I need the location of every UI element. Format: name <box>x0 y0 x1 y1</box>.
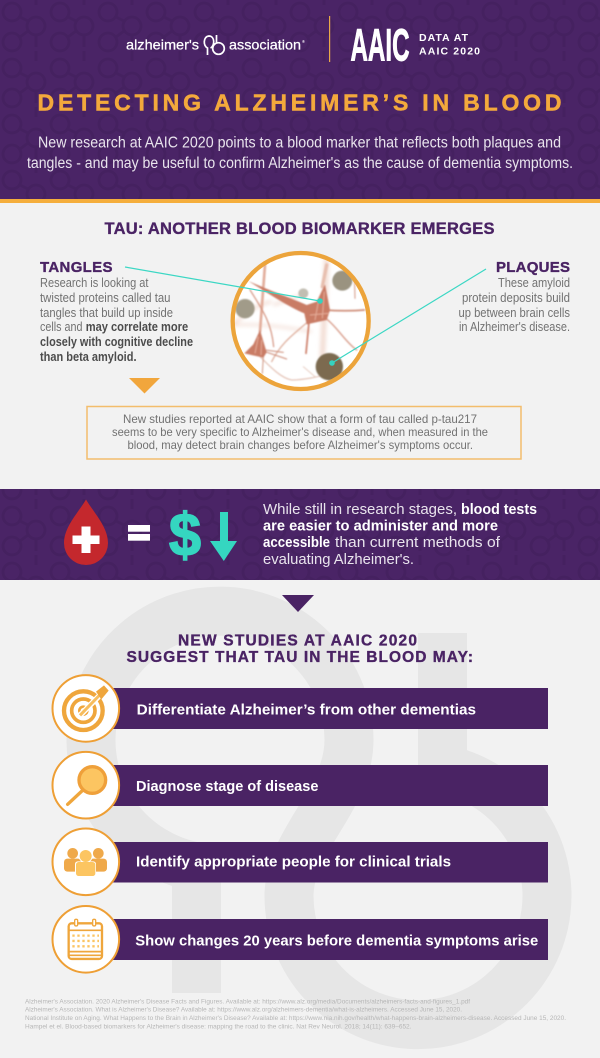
watermark: alzheimer's association symbol <box>91 611 547 1025</box>
plaques <box>235 299 255 318</box>
heading: new studies <box>126 632 473 666</box>
callout box: p-tau217: seems to be very specific to Alzheimer's disease and, when measured in the <box>112 425 488 439</box>
text block: tangles <box>40 259 193 364</box>
callout box: p-tau217: blood, may detect brain changes before Alzheimer's symptoms occur. <box>128 438 473 452</box>
blood tests text: While still in research stages, <box>263 502 457 518</box>
list item: show changes: Show changes 20 years before dementia symptoms arise <box>135 933 538 950</box>
text block: plaques <box>458 259 570 334</box>
data at AAIC 2020 label: DATA AT <box>419 32 469 44</box>
heading: new studies: SUGGEST THAT TAU IN THE BLOOD MAY: <box>126 649 473 666</box>
logo: alzheimer's association <box>126 35 305 55</box>
list item: diagnose: Diagnose stage of disease <box>136 778 318 795</box>
icon: calendar <box>69 919 102 959</box>
list item: diagnose <box>53 752 548 818</box>
text block: tangles: closely with cognitive decline <box>40 335 193 349</box>
references <box>25 998 566 1030</box>
plaques heading: PLAQUES <box>496 259 570 276</box>
data at AAIC 2020 label: AAIC 2020 <box>419 46 480 58</box>
text block: tangles: may correlate more <box>86 320 188 334</box>
panel: blood tests band <box>0 489 600 580</box>
icon: target with arrow <box>64 685 109 730</box>
text block: tangles: cells and <box>40 320 83 334</box>
icon: group of people <box>64 848 107 877</box>
icon: dollar sign: $ <box>169 502 201 568</box>
logo: AAIC: AAIC <box>350 20 410 70</box>
blood tests text: are easier to administer and more <box>263 518 498 534</box>
callout line: tangles <box>125 267 323 304</box>
references: Alzheimer's Association. 2020 Alzheimer's Disease Facts and Figures. Available at: https://www.alz.org/media/Documents/alzheimers-facts-and-figures_1.pdf <box>25 998 470 1006</box>
references: Alzheimer's Association. What is Alzheimer's Disease? Available at: https://www.alz.org/alzheimers-dementia/what-is-alzheimers. Accessed June 15, 2020. <box>25 1007 462 1014</box>
text block: plaques: protein deposits build <box>462 291 570 305</box>
blood tests text: than current methods of <box>335 535 501 551</box>
references: Hampel et el. Blood-based biomarkers for Alzheimer's disease: mapping the road to the clinic. Nat Rev Neurol. 2018; 14(11): 639–652. <box>25 1023 412 1030</box>
callout line: plaques <box>329 269 486 366</box>
icon: magnifying glass <box>68 767 106 804</box>
icon: down arrow <box>210 512 237 561</box>
title: DETECTING ALZHEIMER’S IN BLOOD <box>38 90 562 116</box>
text block: tangles: tangles that build up inside <box>40 306 173 320</box>
text block: tangles: Research is looking at <box>40 276 149 290</box>
blood tests text: evaluating Alzheimer's. <box>263 552 414 568</box>
list item: differentiate <box>53 675 548 742</box>
intro text <box>27 134 573 172</box>
tangles heading: TANGLES <box>40 259 112 276</box>
logo: alzheimer's association: alzheimer's <box>126 36 199 52</box>
list item: identify: Identify appropriate people for clinical trials <box>136 854 451 871</box>
icon: blood drop with cross <box>64 500 108 565</box>
heading: tau biomarker: TAU: ANOTHER BLOOD BIOMARKER EMERGES <box>104 220 494 238</box>
illustration: neurons with plaques and tangles <box>232 253 369 389</box>
panel: header <box>0 0 600 203</box>
list item: identify <box>53 828 548 895</box>
list item: show changes <box>53 906 548 973</box>
blood tests text: blood tests <box>461 502 537 518</box>
text block: plaques: These amyloid <box>498 276 570 290</box>
text block: tangles: than beta amyloid. <box>40 350 136 364</box>
intro text: New research at AAIC 2020 points to a blood marker that reflects both plaques and <box>38 134 561 152</box>
text block: tangles: twisted proteins called tau <box>40 291 171 305</box>
heading: new studies: NEW STUDIES AT AAIC 2020 <box>178 632 417 650</box>
callout box: p-tau217 <box>87 406 521 459</box>
list item: differentiate: Differentiate Alzheimer’s from other dementias <box>137 701 476 718</box>
data at AAIC 2020 label <box>419 32 480 58</box>
icon: equals sign <box>128 525 150 541</box>
text block: plaques: up between brain cells <box>458 306 570 320</box>
blood tests text: accessible <box>263 535 330 551</box>
arrow: purple triangle <box>282 595 314 612</box>
callout box: p-tau217: New studies reported at AAIC show that a form of tau called p-tau217 <box>123 412 477 426</box>
tangle neuron soma <box>248 281 330 324</box>
arrow: orange triangle <box>129 378 160 394</box>
logo: alzheimer's association: ® <box>302 39 305 44</box>
references: National Institute on Aging. What Happens to the Brain in Alzheimer's Disease? Available at: https://www.nia.nih.gov/health/what-happens-brain-alzheimers-disease. Accessed June 15, 2020. <box>25 1015 566 1022</box>
blood tests text <box>263 502 537 568</box>
logo: alzheimer's association: association <box>229 36 301 52</box>
text block: plaques: in Alzheimer's disease. <box>459 320 570 334</box>
